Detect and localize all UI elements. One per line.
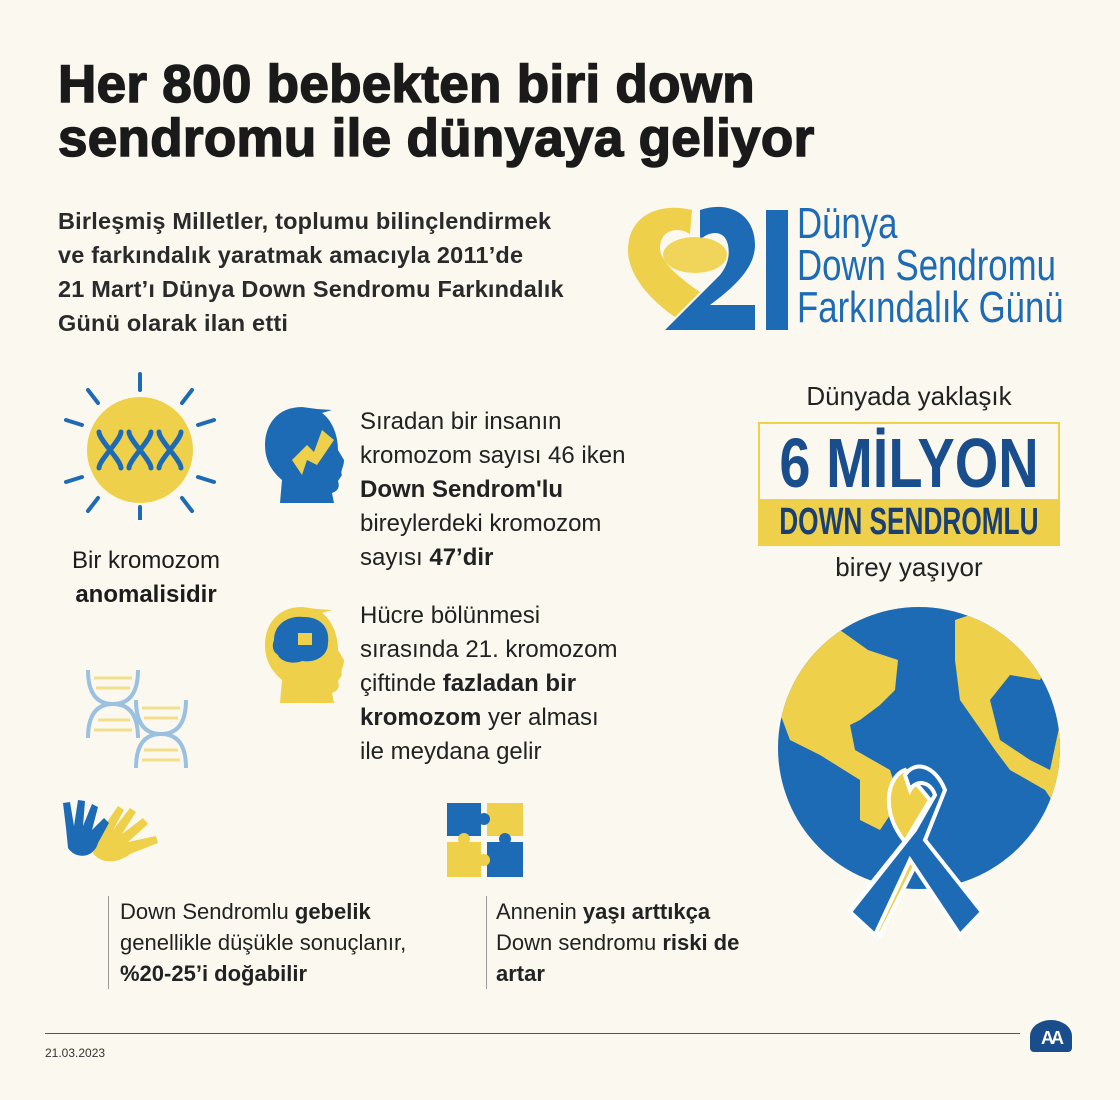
date: 21.03.2023 — [45, 1046, 105, 1060]
title: Her 800 bebekten biri down — [58, 55, 755, 114]
icon: AA logo — [1030, 1020, 1072, 1052]
title — [58, 55, 815, 168]
text: pregnancy — [108, 896, 406, 989]
title: sendromu ile dünyaya geliyor — [58, 109, 815, 168]
text: chromosome count: bireylerdeki kromozom — [360, 510, 601, 537]
intro text: 21 Mart’ı Dünya Down Sendromu Farkındalık — [58, 276, 564, 302]
text: chromosome count: kromozom sayısı 46 iken — [360, 442, 625, 469]
text: mother age — [486, 896, 739, 989]
intro text: ve farkındalık yaratmak amacıyla 2011’de — [58, 242, 523, 268]
text: worldwide: Dünyada yaklaşık — [806, 381, 1012, 411]
text: mother age: Down sendromu riski de — [496, 930, 739, 955]
intro text: Günü olarak ilan etti — [58, 310, 288, 336]
icon: blue head with puzzle — [265, 407, 344, 503]
intro text: Birleşmiş Milletler, toplumu bilinçlendirmek — [58, 208, 551, 234]
logo text — [797, 199, 1064, 332]
text: cell division: çiftinde fazladan bir — [360, 670, 576, 697]
text: cell division — [360, 602, 617, 765]
text: anomaly: Bir kromozom — [72, 547, 220, 574]
text: anomaly: anomalisidir — [75, 581, 217, 608]
text: pregnancy: Down Sendromlu gebelik — [120, 899, 371, 924]
stat box: 6 million: 6 MİLYON — [779, 424, 1039, 502]
icon: chromosome sun — [64, 372, 216, 520]
text: living: birey yaşıyor — [835, 552, 983, 582]
text: anomaly — [72, 547, 220, 608]
text: chromosome count: Sıradan bir insanın — [360, 408, 561, 435]
text: pregnancy: %20-25’i doğabilir — [120, 961, 307, 986]
stat box: 6 million — [758, 422, 1060, 546]
text: cell division: Hücre bölünmesi — [360, 602, 540, 629]
text: mother age: Annenin yaşı arttıkça — [496, 899, 710, 924]
icon: hands — [63, 800, 158, 862]
icon: yellow head with brain — [265, 607, 344, 703]
text: mother age: artar — [496, 961, 545, 986]
icon: puzzle — [447, 803, 523, 877]
logo text: Farkındalık Günü — [797, 283, 1064, 332]
text: cell division: sırasında 21. kromozom — [360, 636, 617, 663]
icon: AA logo: AA — [1041, 1028, 1061, 1048]
text: chromosome count — [360, 408, 625, 571]
text: cell division: kromozom yer alması — [360, 704, 599, 731]
text: chromosome count: Down Sendrom'lu — [360, 476, 563, 503]
divider line — [45, 1033, 1020, 1034]
logo text: Dünya — [797, 199, 897, 248]
intro text — [58, 208, 564, 336]
stat box: 6 million: DOWN SENDROMLU — [779, 501, 1039, 543]
text: cell division: ile meydana gelir — [360, 738, 541, 765]
text: pregnancy: genellikle düşükle sonuçlanır, — [120, 930, 406, 955]
logo text: Down Sendromu — [797, 241, 1056, 290]
logo: 21 heart — [628, 206, 788, 330]
icon: DNA — [86, 670, 188, 768]
text: chromosome count: sayısı 47’dir — [360, 544, 493, 571]
globe with ribbon — [778, 607, 1060, 938]
